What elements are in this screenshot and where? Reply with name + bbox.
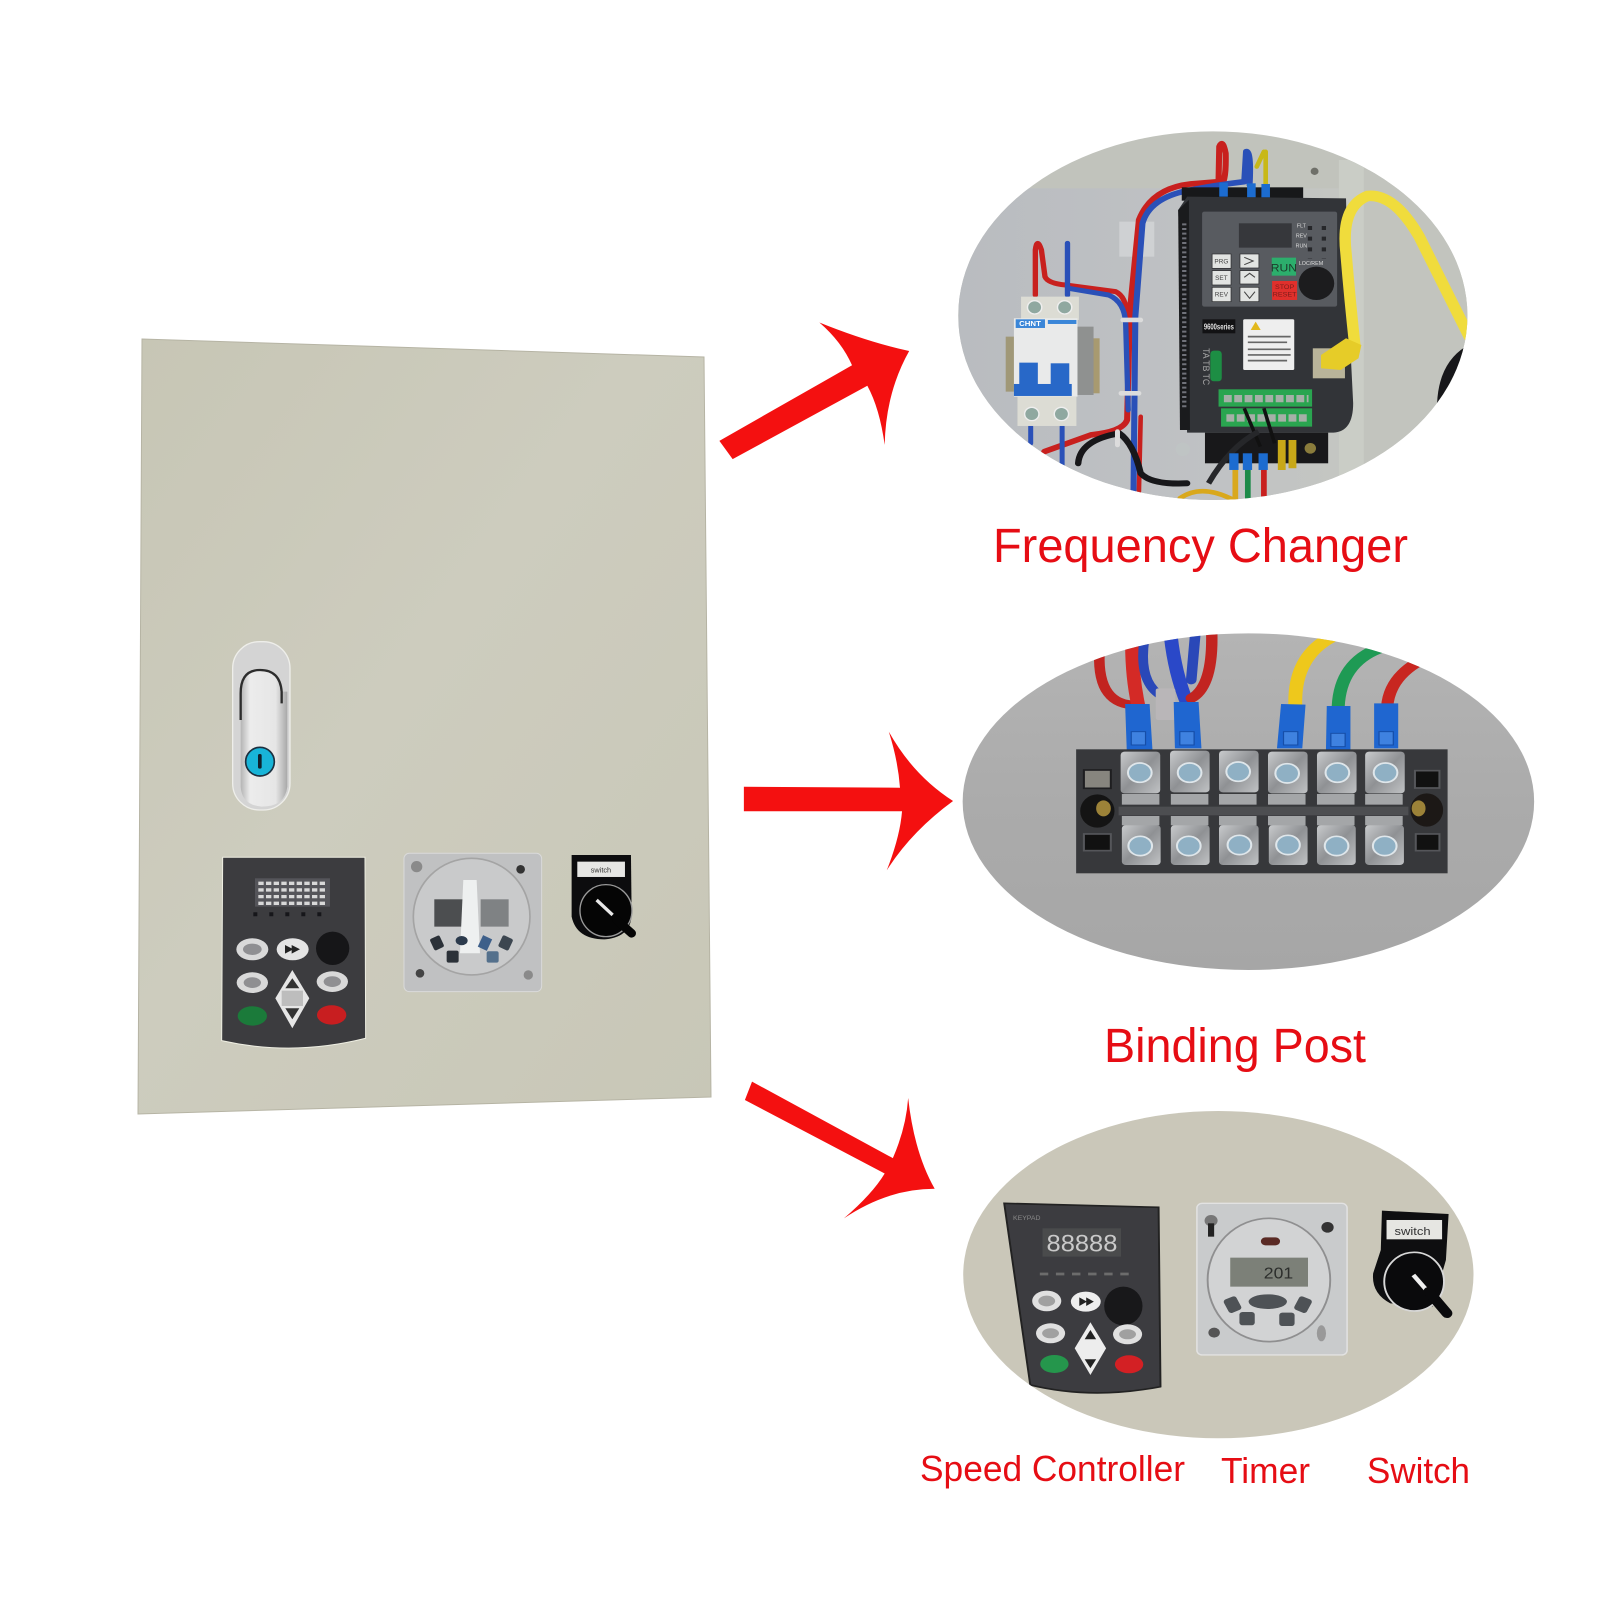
arrow: to frequency changer bbox=[719, 322, 909, 459]
label: switch: Switch bbox=[1367, 1450, 1470, 1491]
timer on cabinet bbox=[404, 853, 542, 992]
infographic canvas bbox=[138, 131, 1534, 1488]
inverter drive unit bbox=[1176, 183, 1353, 483]
inverter drive unit: RESET bbox=[1273, 292, 1297, 299]
digital timer bbox=[1197, 1203, 1347, 1355]
panel: cabinet with door hardware bbox=[138, 339, 711, 1114]
panel: controls photo bbox=[957, 1107, 1482, 1443]
speed controller keypad: 88888 bbox=[1047, 1231, 1117, 1257]
inverter drive unit: PRG bbox=[1214, 258, 1229, 265]
inverter drive unit: 9600series bbox=[1204, 323, 1234, 331]
arrow: to controls bbox=[745, 1082, 935, 1218]
circuit breaker: CHNT bbox=[1019, 319, 1041, 328]
speed controller keypad: KEYPAD bbox=[1013, 1215, 1041, 1222]
inverter drive unit: STOP bbox=[1275, 284, 1295, 291]
inverter drive unit: RUN bbox=[1296, 243, 1307, 249]
inverter drive unit: TA TB TC bbox=[1201, 348, 1211, 386]
label: binding post: Binding Post bbox=[1104, 1020, 1366, 1073]
inverter drive unit: RUN bbox=[1271, 262, 1297, 274]
inverter drive unit: LOC/REM bbox=[1299, 261, 1323, 267]
crimp terminals bbox=[1125, 702, 1398, 750]
terminal block bbox=[1076, 749, 1448, 873]
keypad on cabinet bbox=[222, 857, 366, 1048]
label: speed controller: Speed Controller bbox=[920, 1448, 1185, 1489]
wires: binding post bbox=[1099, 630, 1416, 707]
speed controller keypad bbox=[1004, 1203, 1161, 1393]
panel: binding post photo bbox=[954, 630, 1542, 977]
inverter drive unit: REV bbox=[1215, 292, 1229, 299]
selector switch on cabinet bbox=[572, 855, 632, 939]
selector switch on cabinet: switch bbox=[591, 866, 611, 875]
panel: frequency changer photo bbox=[951, 123, 1480, 507]
digital timer: 201 bbox=[1264, 1265, 1293, 1282]
selector switch: switch bbox=[1395, 1225, 1431, 1238]
selector switch bbox=[1373, 1211, 1449, 1313]
inverter drive unit: SET bbox=[1215, 275, 1228, 282]
arrow: to binding post bbox=[744, 732, 953, 870]
cable: yellow network cable bbox=[1321, 196, 1469, 370]
inverter drive unit: REV bbox=[1296, 234, 1307, 240]
icon: door lock handle bbox=[233, 642, 290, 810]
circuit breaker bbox=[1006, 297, 1100, 426]
label: frequency changer: Frequency Changer bbox=[993, 520, 1408, 573]
inverter drive unit: FLT bbox=[1297, 223, 1307, 229]
wires: frequency changer bbox=[1031, 144, 1266, 500]
label: timer: Timer bbox=[1221, 1450, 1310, 1491]
